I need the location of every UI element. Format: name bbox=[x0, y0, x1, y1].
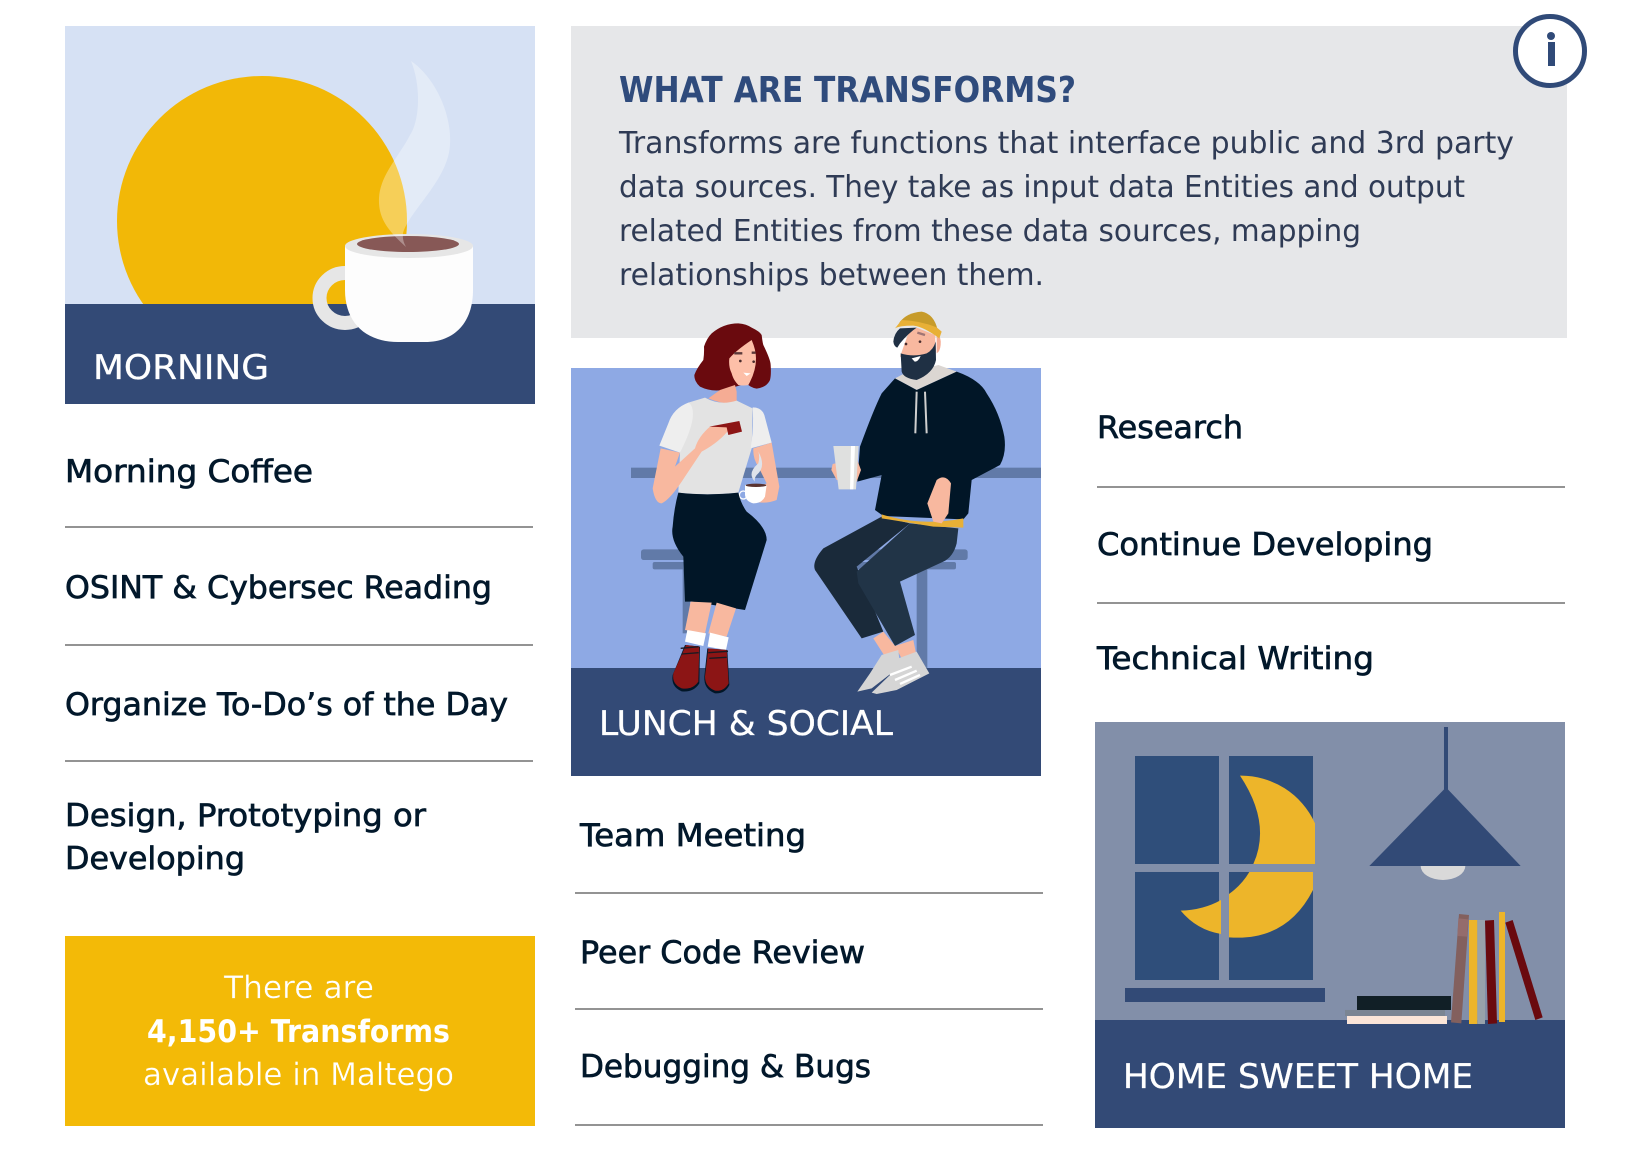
list: morning tasks bbox=[65, 454, 533, 877]
illustration: two people at a counter bbox=[631, 312, 1041, 694]
list: afternoon tasks bbox=[575, 818, 1043, 1126]
text block: definition: relationships between them. bbox=[619, 258, 1044, 293]
text block: definition: related Entities from these data sources, mapping bbox=[619, 214, 1361, 249]
list: afternoon tasks: Team Meeting bbox=[579, 818, 806, 854]
icon: window with moon bbox=[1125, 756, 1325, 1002]
callout: transforms count: There are bbox=[223, 970, 374, 1006]
heading: home sweet home: HOME SWEET HOME bbox=[1123, 1057, 1473, 1097]
list: late afternoon tasks bbox=[1096, 410, 1565, 677]
list: late afternoon tasks: Technical Writing bbox=[1096, 641, 1374, 677]
heading: what are transforms: WHAT ARE TRANSFORMS? bbox=[619, 70, 1076, 111]
counter and stools bbox=[631, 468, 1041, 668]
text block: definition bbox=[618, 126, 1514, 293]
heading: morning: MORNING bbox=[93, 348, 269, 388]
heading: lunch and social: LUNCH & SOCIAL bbox=[599, 704, 893, 744]
icon: books bbox=[1345, 912, 1543, 1024]
panel: home sweet home bbox=[1095, 722, 1565, 1128]
list: late afternoon tasks: Continue Developing bbox=[1097, 527, 1433, 563]
list: morning tasks: Developing bbox=[65, 841, 245, 877]
panel: morning bbox=[65, 26, 535, 404]
text block: definition: data sources. They take as input data Entities and output bbox=[619, 170, 1465, 205]
list: afternoon tasks: Peer Code Review bbox=[580, 935, 865, 971]
callout: transforms count: 4,150+ Transforms bbox=[147, 1014, 450, 1050]
man bbox=[814, 312, 1005, 694]
panel: what are transforms bbox=[571, 26, 1567, 338]
list: morning tasks: Organize To-Do’s of the Day bbox=[65, 687, 508, 723]
callout: transforms count: available in Maltego bbox=[143, 1057, 454, 1093]
panel: lunch and social bbox=[571, 312, 1041, 776]
list: morning tasks: OSINT & Cybersec Reading bbox=[65, 570, 492, 606]
illustration: window, lamp and books bbox=[1125, 727, 1543, 1024]
woman bbox=[653, 323, 779, 693]
list: morning tasks: Morning Coffee bbox=[65, 454, 313, 490]
callout: transforms count bbox=[65, 936, 535, 1126]
icon: coffee cup bbox=[320, 61, 473, 342]
text block: definition: Transforms are functions that interface public and 3rd party bbox=[618, 126, 1514, 161]
list: morning tasks: Design, Prototyping or bbox=[65, 798, 426, 834]
icon: rising sun bbox=[117, 76, 407, 366]
list: afternoon tasks: Debugging & Bugs bbox=[580, 1049, 871, 1085]
list: late afternoon tasks: Research bbox=[1097, 410, 1243, 446]
icon: lamp bbox=[1369, 727, 1521, 880]
icon: info bbox=[1516, 16, 1584, 86]
